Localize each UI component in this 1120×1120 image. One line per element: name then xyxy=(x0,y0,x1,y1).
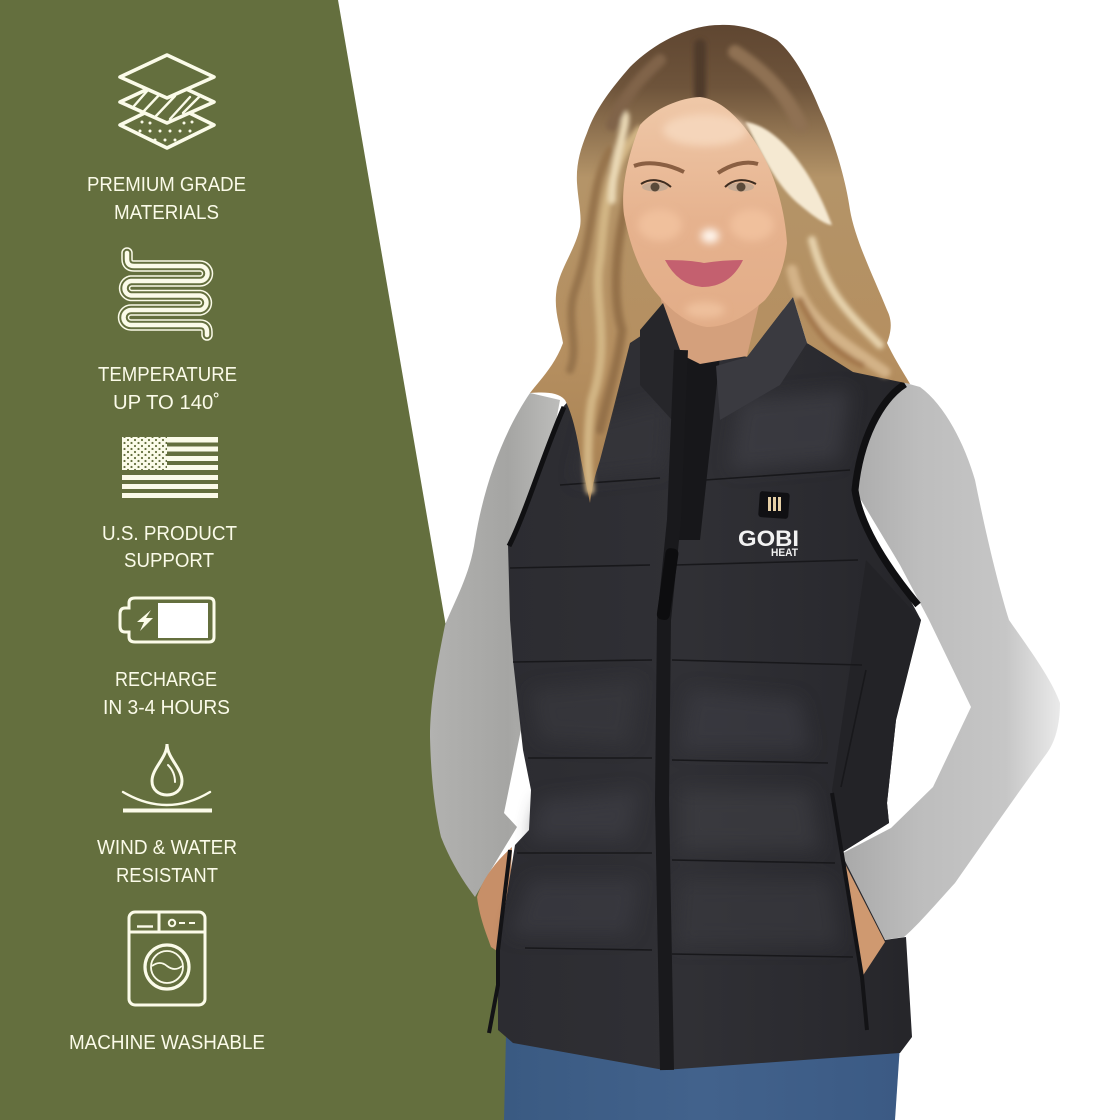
feature: temperature xyxy=(98,253,237,414)
label: RECHARGE xyxy=(115,669,217,691)
left collar xyxy=(640,303,680,420)
feature: wind and water xyxy=(97,744,237,887)
hair strands and highlights xyxy=(570,45,885,490)
zipper xyxy=(662,350,681,1070)
feature: premium grade materials xyxy=(87,55,246,224)
left hand xyxy=(477,847,512,953)
label line two: UP TO 140˚ xyxy=(113,392,220,414)
feature: us product support xyxy=(102,437,237,572)
left sleeve xyxy=(430,393,560,897)
vest logo: GOBI xyxy=(738,526,799,551)
neck xyxy=(660,295,760,364)
icon: american flag xyxy=(122,437,218,498)
label: WIND & WATER xyxy=(97,837,237,859)
face xyxy=(623,97,787,327)
side panel shading xyxy=(832,560,921,853)
cheek and nose light xyxy=(638,114,774,318)
vest logo: HEAT xyxy=(771,547,798,559)
feature: machine washable xyxy=(69,912,265,1054)
vest control button xyxy=(758,491,790,519)
icon: heating coil xyxy=(124,253,208,335)
quilting seams xyxy=(510,470,866,957)
vest body xyxy=(498,305,921,1070)
pockets xyxy=(489,793,867,1033)
blond highlight on right side of face xyxy=(745,122,832,225)
icon: water drop xyxy=(123,744,212,810)
panel: green background xyxy=(0,0,531,1120)
vest logo xyxy=(738,526,799,559)
icon: fabric layers xyxy=(120,55,214,148)
right hand xyxy=(843,860,885,977)
jeans xyxy=(504,1035,900,1120)
left armhole binding xyxy=(509,407,564,546)
label: MACHINE WASHABLE xyxy=(69,1032,265,1054)
feature: recharge xyxy=(103,598,230,719)
icon: battery xyxy=(120,598,214,642)
inner vest placket xyxy=(672,352,720,540)
hair xyxy=(530,25,910,503)
eyes and brows xyxy=(634,163,758,192)
label line two: RESISTANT xyxy=(116,865,218,887)
zipper pull xyxy=(656,548,679,621)
icon: washing machine xyxy=(129,912,205,1005)
right armhole binding xyxy=(855,384,918,605)
quilted panel highlights xyxy=(510,390,850,945)
label line two: MATERIALS xyxy=(114,202,219,224)
label: PREMIUM GRADE xyxy=(87,174,246,196)
photo: woman wearing heated vest xyxy=(430,25,1060,1120)
right sleeve xyxy=(843,380,1060,940)
mouth xyxy=(665,260,743,287)
label: TEMPERATURE xyxy=(98,364,237,386)
label line two: SUPPORT xyxy=(124,550,214,572)
right collar xyxy=(716,297,807,420)
label line two: IN 3-4 HOURS xyxy=(103,697,230,719)
label: U.S. PRODUCT xyxy=(102,523,237,545)
